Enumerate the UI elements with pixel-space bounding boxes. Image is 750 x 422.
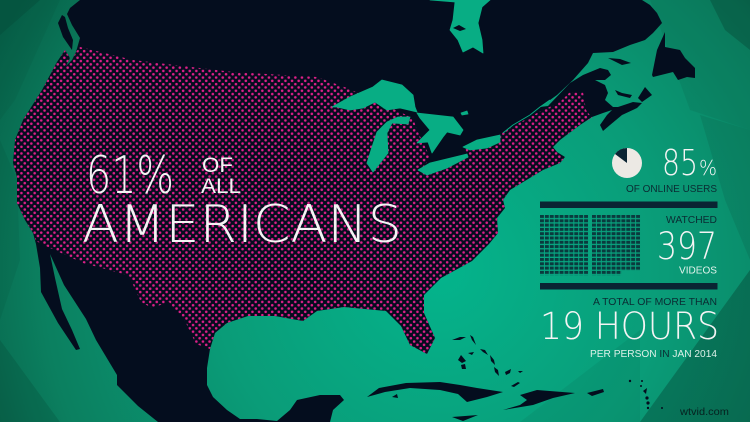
headline: 61% of all Americans: ALL [201,175,241,198]
island: Akimiski [453,25,466,31]
map: dotted United States [13,47,592,354]
stat: watched 397 videos [657,214,717,276]
stat: a total of more than 19 hours: PER PERSON IN JAN 2014 [590,348,717,360]
icon: 85% pie chart [612,148,642,178]
lake: Ontario [463,135,500,150]
stat: 85% of online users: % [699,156,717,180]
island: Jamaica [452,415,478,421]
map: Great Lakes and Hudson Bay [332,0,550,175]
island: Vancouver [58,15,73,50]
headline: 61% of all Americans: 61% [86,146,174,206]
stat: 85% of online users [626,143,717,195]
lake: Huron [417,113,463,153]
stat: watched 397 videos: 397 [657,225,717,268]
headline: 61% of all Americans: AMERICANS [82,195,402,255]
island: Hispaniola [503,390,575,410]
island: Cuba [367,382,503,402]
chart: grid of 397 video marks [540,215,640,276]
island: Cape Breton [638,87,652,102]
bay: James Bay [430,0,490,53]
headline: 61% of all Americans [82,146,402,255]
watermark: wtvid.com [679,406,729,418]
headline: 61% of all Americans: OF [202,154,233,177]
island: Newfoundland [652,32,695,80]
stat: 85% of online users: OF ONLINE USERS [626,183,717,195]
lake: Superior [332,80,417,112]
island: Puerto Rico [587,389,604,396]
lake: Nipigon [461,111,468,115]
island: Anticosti [608,58,631,65]
stat: watched 397 videos: WATCHED [666,214,717,226]
lake: Erie [418,154,468,175]
islands: Bahamas [392,335,523,398]
islands: Lesser Antilles [629,380,663,409]
island: Prince Edward [615,90,632,98]
stat: a total of more than 19 hours: A TOTAL OF MORE THAN [593,296,717,308]
stat: a total of more than 19 hours [540,296,719,360]
stat: a total of more than 19 hours: 19 HOURS [540,305,719,348]
stat: watched 397 videos: VIDEOS [679,266,717,276]
lake: Michigan [367,117,410,172]
river: St Lawrence [503,100,550,133]
stat: 85% of online users: 85 [662,143,698,184]
